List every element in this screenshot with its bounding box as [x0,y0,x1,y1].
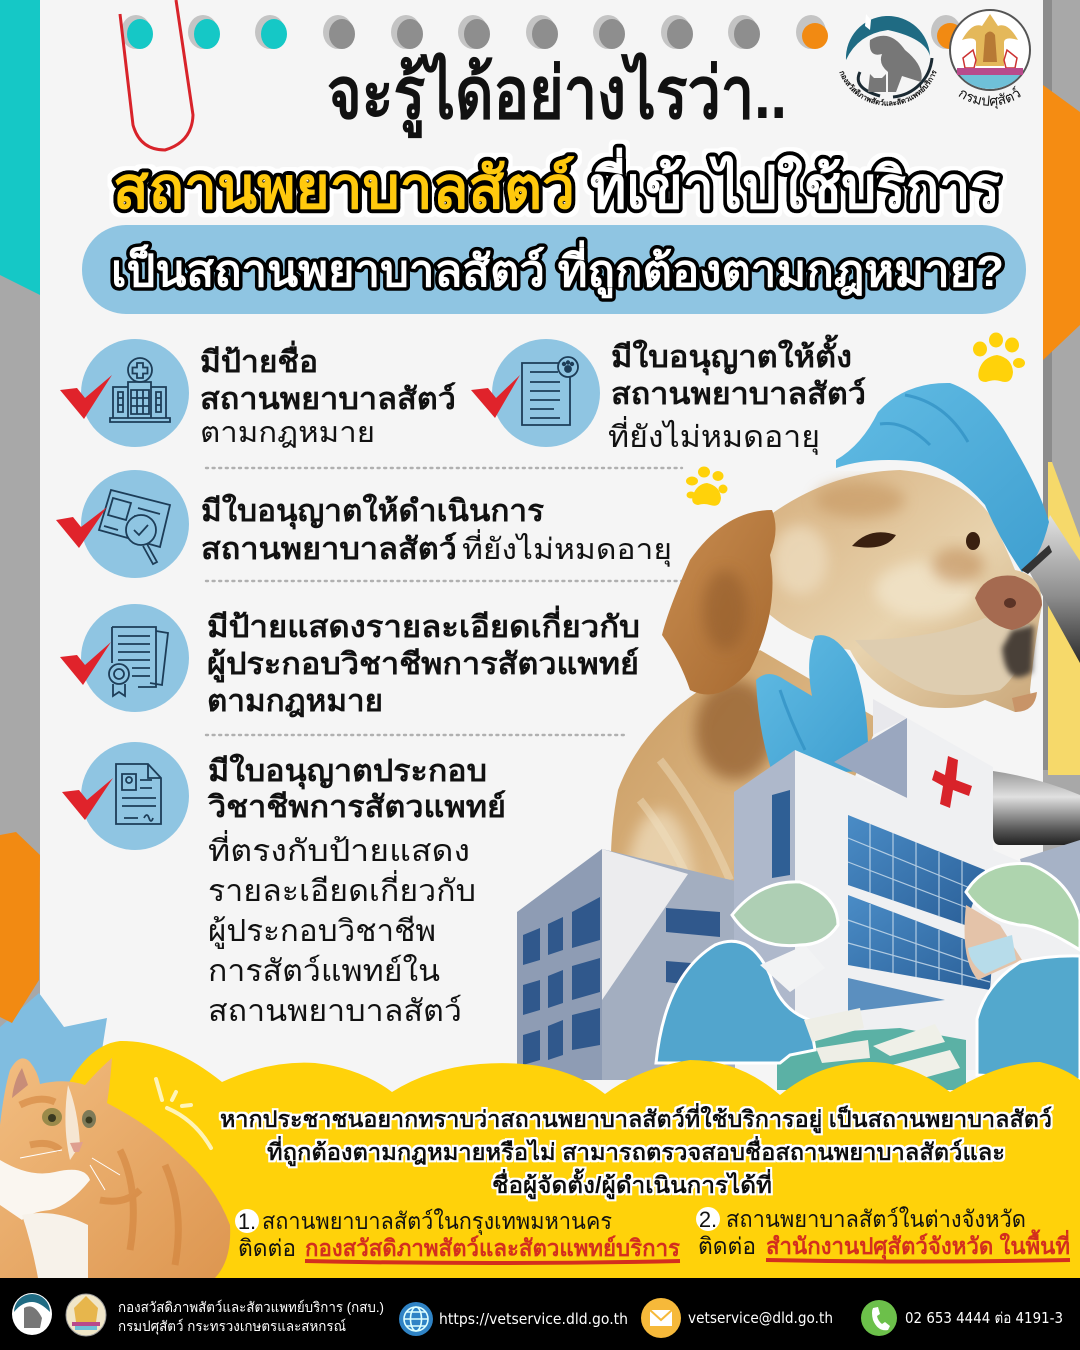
dog eyes [852,532,896,548]
icon: card and magnifier [99,490,170,564]
checklist item 1: hospital sign: สถานพยาบาลสัตว์ [200,382,456,416]
red check [56,507,107,548]
checklist item 4: practitioner details sign: ตามกฎหมาย [207,685,383,718]
notebook binder holes [121,15,963,49]
cuff [1021,545,1052,574]
photo: dog [611,470,1042,1035]
red check [62,778,113,820]
red check [60,375,112,419]
checklist item 3: operating licence: สถานพยาบาลสัตว์ [201,532,457,566]
checklist item 2: establishment licence [471,334,866,456]
label: มีป้ายชื่อ [200,340,318,379]
yellow scalloped band [0,1041,1080,1278]
contact 2: provinces [696,1206,1070,1262]
heading: veterinary hospital you use: ที่เข้าไปใช้บริการ [590,147,1000,221]
contact 2: provinces: 2. [699,1207,717,1232]
checklist item 4: practitioner details sign [60,604,640,718]
photo: right surgeon [873,864,1080,1083]
red check [471,375,520,418]
icon: hospital building [110,358,170,422]
footer bar: กรมปศุสัตว์ กระทรวงเกษตรและสหกรณ์ [118,1318,346,1335]
icon: document with paw [522,357,578,425]
icon: paw small [686,466,728,506]
dotted dividers [206,468,682,735]
photo: lower arm cylinder [993,771,1080,845]
heading: veterinary hospital you use: สถานพยาบาลสัตว์ [113,155,575,221]
checklist item 5: professional licence: รายละเอียดเกี่ยวกับ [208,870,476,908]
checklist item 1: hospital sign: ตามกฎหมาย [200,417,375,449]
footer logo 2 [66,1294,106,1336]
contact 1: Bangkok: กองสวัสดิภาพสัตว์และสัตวแพทย์บริการ [305,1235,681,1261]
photo: surgery drape [777,1028,966,1090]
checklist item 1: hospital sign [60,339,456,449]
checklist item 4: practitioner details sign: ผู้ประกอบวิชาชีพการสัตวแพทย์ [207,647,639,683]
checklist item 5: professional licence: สถานพยาบาลสัตว์ [208,994,462,1028]
footer organisation text: กองสวัสดิภาพสัตว์และสัตวแพทย์บริการ (กสบ.) [118,1299,384,1315]
checklist item 2: establishment licence: ที่ยังไม่หมดอายุ [608,416,820,456]
icon: globe [399,1302,433,1336]
checklist item 5: professional licence: การสัตว์แพทย์ใน [208,954,440,988]
info paragraph: ชื่อผู้จัดตั้ง/ผู้ดำเนินการได้ที่ [492,1168,772,1200]
photo: left surgeon [656,882,870,1063]
orange corner shape [0,832,40,1023]
footer bar [0,1278,1080,1350]
pill heading: legal hospital question [82,225,1026,314]
checklist item 2: establishment licence: สถานพยาบาลสัตว์ [611,377,866,411]
info paragraph: ที่ถูกต้องตามกฎหมายหรือไม่ สามารถตรวจสอบชื่อสถานพยาบาลสัตว์และ [267,1135,1005,1167]
red cross [932,756,972,808]
logo: department of livestock [949,9,1031,109]
logo: animal welfare division [839,14,936,106]
contact 1: Bangkok: 1. [238,1209,256,1234]
left wing wall [517,849,602,1080]
icon: paw large [973,332,1025,382]
dog body [611,650,880,1035]
checklist item 5: professional licence: ผู้ประกอบวิชาชีพ [208,915,436,949]
phone number: 02 653 4444 ต่อ 4191-3 [905,1309,1063,1327]
icon: mail [641,1298,681,1338]
red paper clip [120,0,193,150]
checklist item 3: operating licence [56,470,672,578]
title: handwritten question: จะรู้ได้อย่างไรว่า.. [327,51,787,139]
photo: lower glove [756,635,868,773]
label: มีใบอนุญาตให้ดำเนินการ [201,493,544,530]
contact 2: provinces: สถานพยาบาลสัตว์ในต่างจังหวัด [726,1206,1026,1232]
website: https://vetservice.dld.go.th [439,1310,628,1328]
photo: orange cat [0,1058,230,1278]
photo: vet arm upper [1030,515,1080,663]
logo: department of livestock: กรมปศุสัตว์ [958,86,1021,109]
dog ear [662,510,776,694]
logo: animal welfare division: กองสวัสดิภาพสัตว์และสัตวแพทย์บริการ [839,70,936,106]
email: vetservice@dld.go.th [688,1309,833,1327]
dog nose [975,575,1042,630]
contact 1: Bangkok [235,1208,681,1263]
heading: veterinary hospital you use [113,147,1000,221]
contact 2: provinces: ติดต่อ [698,1233,756,1259]
icon: papers with seal [109,627,168,696]
icon: id document [116,764,161,824]
red check [60,642,111,685]
photo: hospital building [517,699,1080,1080]
checklist item 5: professional licence: วิชาชีพการสัตวแพทย์ [207,790,506,824]
label: มีป้ายแสดงรายละเอียดเกี่ยวกับ [207,605,640,644]
checklist item 3: operating licence: ที่ยังไม่หมดอายุ [462,529,672,567]
info paragraph: หากประชาชนอยากทราบว่าสถานพยาบาลสัตว์ที่ใช้บริการอยู่ เป็นสถานพยาบาลสัตว์ [220,1102,1052,1134]
sparkle lines [156,1079,211,1148]
icon: phone [861,1300,897,1336]
checklist item 5: professional licence: ที่ตรงกับป้ายแสดง [208,830,470,868]
contact 1: Bangkok: ติดต่อ [238,1235,296,1261]
main paper panel [40,0,1043,1100]
label: มีใบอนุญาตให้ตั้ง [611,334,852,376]
checklist item 5: professional licence [62,742,506,1028]
photo: upper glove [836,383,1049,572]
main block windows [848,815,985,925]
main block [734,750,795,1060]
left wing windows [523,897,720,1065]
info paragraph [220,1102,1052,1200]
contact 1: Bangkok: สถานพยาบาลสัตว์ในกรุงเทพมหานคร [262,1208,612,1235]
dog head [754,470,1042,712]
blue star behind cat [0,993,136,1130]
label: มีใบอนุญาตประกอบ [208,753,487,790]
pill heading: legal hospital question: เป็นสถานพยาบาลสัตว์ ที่ถูกต้องตามกฎหมาย? [111,240,1004,298]
footer logo 1 [12,1293,52,1335]
contact 2: provinces: สำนักงานปศุสัตว์จังหวัด ในพื้นที่ [766,1229,1070,1261]
